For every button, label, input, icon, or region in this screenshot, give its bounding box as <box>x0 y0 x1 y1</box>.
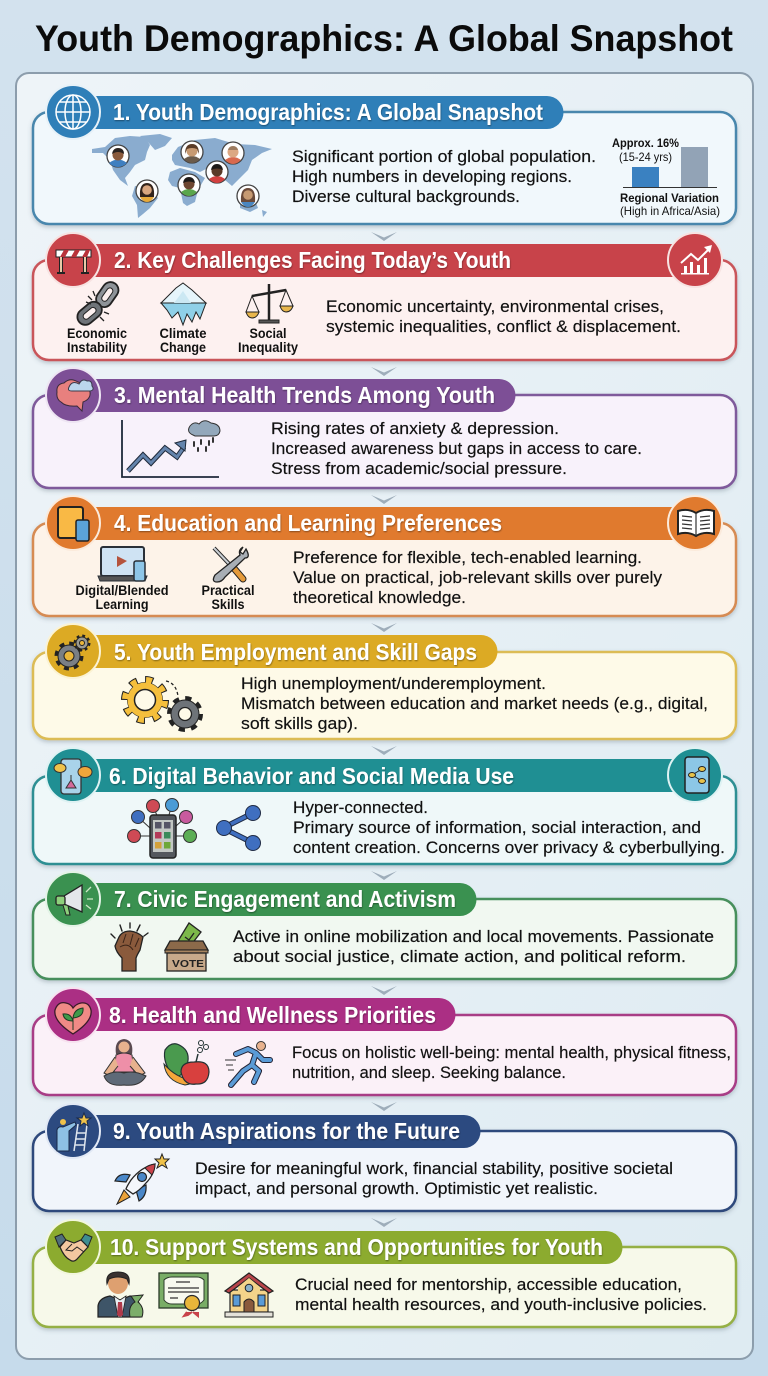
icon: scales <box>246 284 293 323</box>
text block 5 <box>241 674 708 733</box>
portrait <box>107 145 129 167</box>
heading 2: 2. Key Challenges Facing Today’s Youth <box>114 247 511 273</box>
label <box>160 326 207 355</box>
icon: brain and cloud <box>46 368 100 422</box>
text block 4 <box>293 548 662 607</box>
world map with youth portraits <box>92 134 272 218</box>
icon: phone with social apps <box>128 798 196 858</box>
header bar 10 <box>90 1231 622 1264</box>
text block 6: Hyper-connected. <box>293 798 428 817</box>
icon: globe <box>46 85 100 139</box>
panel: 5 employment <box>33 624 736 739</box>
heading 5: 5. Youth Employment and Skill Gaps <box>114 639 477 665</box>
portrait <box>136 180 158 202</box>
text block 4: Preference for flexible, tech-enabled learning. <box>293 548 642 567</box>
text block 4: Value on practical, job-relevant skills over purely <box>293 568 662 587</box>
header bar 8 <box>90 998 456 1031</box>
icon: share <box>216 806 260 850</box>
panel: 7 civic engagement <box>33 872 736 979</box>
icon: wrench and screwdriver <box>213 547 248 582</box>
text block 8 <box>292 1043 731 1082</box>
text block 5: soft skills gap). <box>241 714 358 733</box>
icon: rocket with star <box>115 1154 169 1204</box>
text block 3: Increased awareness but gaps in access to care. <box>271 439 642 458</box>
text block 9 <box>195 1159 673 1198</box>
icon: heart with sprout <box>46 988 100 1042</box>
label: Learning <box>96 597 148 612</box>
panel: 1 youth demographics <box>33 85 736 224</box>
header bar 1 <box>90 96 564 129</box>
icon: barricade <box>46 233 100 287</box>
panel: 3 mental health <box>33 368 736 488</box>
icon: iceberg <box>161 283 206 325</box>
icon: broken chain <box>74 279 122 328</box>
icon: mentor <box>98 1272 143 1317</box>
label: Practical <box>202 583 254 598</box>
label: Instability <box>67 340 127 355</box>
header bar 5 <box>90 635 498 668</box>
heading 1: 1. Youth Demographics: A Global Snapshot <box>113 99 543 125</box>
text block 8: Focus on holistic well-being: mental health, physical fitness, <box>292 1043 731 1062</box>
icon: small gears <box>46 624 100 678</box>
header bar 4 <box>90 507 680 540</box>
heading 9: 9. Youth Aspirations for the Future <box>113 1118 460 1144</box>
label: Digital/Blended <box>76 583 168 598</box>
bar chart: regional variation <box>612 136 720 218</box>
text block 10: Crucial need for mentorship, accessible education, <box>295 1275 682 1294</box>
heading 6: 6. Digital Behavior and Social Media Use <box>109 763 514 789</box>
portrait <box>206 161 228 183</box>
label: Social <box>250 326 286 341</box>
label: Economic <box>67 326 127 341</box>
panel: 2 key challenges <box>33 233 736 360</box>
icon: megaphone <box>46 872 100 926</box>
text block 1 <box>292 147 596 206</box>
icon: tablet and phone <box>46 496 100 550</box>
bar chart: regional variation: Regional Variation <box>620 191 719 205</box>
text block 10: mental health resources, and youth-inclusive policies. <box>295 1295 707 1314</box>
icon: ballot box: VOTE <box>172 958 204 970</box>
text block 3: Stress from academic/social pressure. <box>271 459 567 478</box>
label <box>202 583 254 612</box>
heading 7: 7. Civic Engagement and Activism <box>114 886 456 912</box>
text block 7: Active in online mobilization and local movements. Passionate <box>233 927 714 946</box>
icon: phone with chat bubbles <box>46 748 100 802</box>
text block 3: Rising rates of anxiety & depression. <box>271 419 559 438</box>
label: Skills <box>212 597 244 612</box>
text block 7 <box>233 927 714 966</box>
label: Change <box>160 340 206 355</box>
text block 9: Desire for meaningful work, financial stability, positive societal <box>195 1159 673 1178</box>
icon: phone with network <box>668 748 722 802</box>
label <box>76 583 168 612</box>
icon: handshake <box>46 1220 100 1274</box>
icon: meditation <box>104 1039 146 1085</box>
text block 2: Economic uncertainty, environmental crises, <box>326 297 664 316</box>
title: Youth Demographics: A Global Snapshot <box>35 18 733 59</box>
text block 5: High unemployment/underemployment. <box>241 674 546 693</box>
panel: 10 support systems <box>33 1220 736 1327</box>
text block 2: systemic inequalities, conflict & displacement. <box>326 317 681 336</box>
text block 2 <box>326 297 681 336</box>
portrait <box>222 142 244 164</box>
panel: 6 digital behavior <box>33 748 736 864</box>
heading 4: 4. Education and Learning Preferences <box>114 510 502 536</box>
icon: growth chart <box>668 233 722 287</box>
icon: laptop with video <box>98 547 147 581</box>
header bar 3 <box>90 379 516 412</box>
heading 8: 8. Health and Wellness Priorities <box>109 1002 436 1028</box>
text block 10 <box>295 1275 707 1314</box>
text block 6: content creation. Concerns over privacy & cyberbullying. <box>293 838 725 857</box>
text block 4: theoretical knowledge. <box>293 588 466 607</box>
panel: 9 aspirations <box>33 1104 736 1211</box>
flow chevrons <box>371 232 397 1227</box>
icon: ballot box <box>165 923 208 971</box>
portrait <box>181 141 203 163</box>
icon: interlocking gears <box>125 680 200 728</box>
icon: runner <box>225 1042 270 1085</box>
text block 8: nutrition, and sleep. Seeking balance. <box>292 1063 566 1082</box>
icon: healthy food <box>164 1040 209 1085</box>
bar chart: regional variation: (15-24 yrs) <box>619 150 672 164</box>
text block 7: about social justice, climate action, and political reform. <box>233 947 686 966</box>
label: Climate <box>160 326 207 341</box>
text block 1: Significant portion of global population. <box>292 147 596 166</box>
icon: raised fist <box>111 923 148 971</box>
chart: rising trend with rain cloud <box>122 420 220 477</box>
bar chart: regional variation: Approx. 16% <box>612 136 679 150</box>
portrait <box>237 185 259 207</box>
icon: person reaching star with ladder <box>46 1104 100 1158</box>
panel: 4 education <box>33 496 736 616</box>
text block 3 <box>271 419 642 478</box>
heading 3: 3. Mental Health Trends Among Youth <box>114 382 495 408</box>
label <box>238 326 298 355</box>
bar chart: regional variation: (High in Africa/Asia) <box>620 204 720 218</box>
portrait <box>178 174 200 196</box>
text block 1: High numbers in developing regions. <box>292 167 572 186</box>
label <box>67 326 127 355</box>
icon: open book <box>668 496 722 550</box>
heading 10: 10. Support Systems and Opportunities for Youth <box>110 1234 603 1260</box>
text block 6 <box>293 798 725 857</box>
icon: certificate <box>159 1273 208 1316</box>
label: Inequality <box>238 340 298 355</box>
text block 5: Mismatch between education and market needs (e.g., digital, <box>241 694 708 713</box>
text block 9: impact, and personal growth. Optimistic yet realistic. <box>195 1179 598 1198</box>
panel: 8 health and wellness <box>33 988 736 1095</box>
icon: school building <box>225 1273 273 1317</box>
header bar 6 <box>90 759 680 792</box>
text block 1: Diverse cultural backgrounds. <box>292 187 520 206</box>
header bar 7 <box>90 883 476 916</box>
header bar 9 <box>90 1115 480 1148</box>
text block 6: Primary source of information, social interaction, and <box>293 818 701 837</box>
header bar 2 <box>90 244 680 277</box>
